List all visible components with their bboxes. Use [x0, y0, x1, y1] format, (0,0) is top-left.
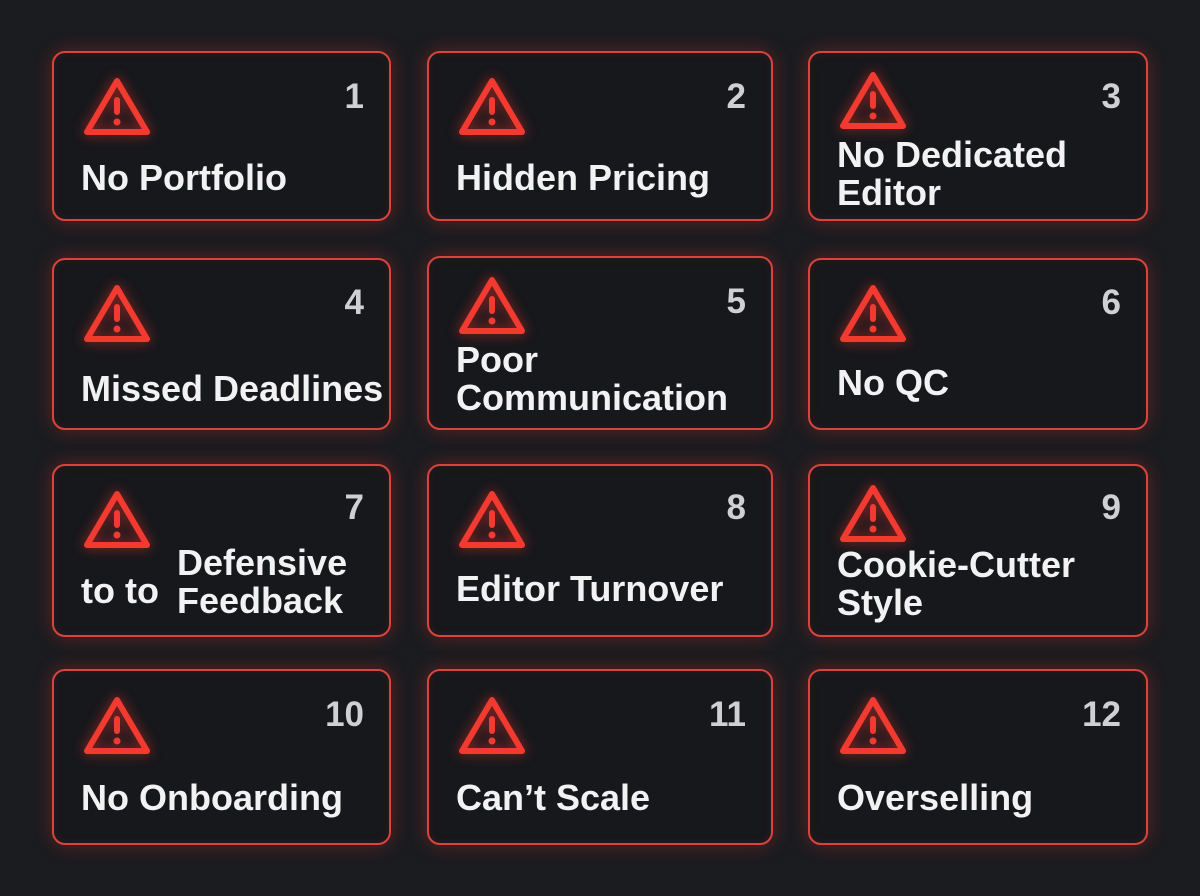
- title: No QC: [837, 362, 949, 403]
- card 6: [808, 258, 1148, 430]
- title: [837, 134, 1067, 213]
- icon: warning: [78, 485, 156, 557]
- number: 1: [345, 77, 364, 116]
- title: Poor: [456, 339, 538, 380]
- icon: warning: [834, 479, 912, 551]
- number: 4: [345, 283, 364, 322]
- number: 12: [1082, 695, 1121, 734]
- card 4: [52, 258, 391, 430]
- icon: warning: [452, 271, 532, 343]
- title: to to: [81, 570, 159, 611]
- number: 3: [1102, 77, 1121, 116]
- card 9: [808, 464, 1148, 637]
- title continued: Feedback: [177, 580, 343, 621]
- title: No Portfolio: [81, 157, 287, 198]
- number: 10: [325, 695, 364, 734]
- card 7: [52, 464, 391, 637]
- number: 7: [345, 488, 364, 527]
- card 1: [52, 51, 391, 221]
- number: 9: [1102, 488, 1121, 527]
- title continued: Defensive: [177, 542, 347, 583]
- icon: warning: [78, 691, 156, 763]
- card 10: [52, 669, 391, 845]
- title: Style: [837, 582, 923, 623]
- card 8: [427, 464, 773, 637]
- title: Editor: [837, 172, 941, 213]
- card 11: [427, 669, 773, 845]
- number: 6: [1102, 283, 1121, 322]
- title: Editor Turnover: [456, 568, 723, 609]
- title: Overselling: [837, 777, 1033, 818]
- title: [456, 339, 728, 418]
- number: 11: [709, 695, 746, 734]
- title: No Onboarding: [81, 777, 343, 818]
- card 3: [808, 51, 1148, 221]
- number: 5: [727, 282, 746, 321]
- title: [837, 544, 1075, 623]
- number: 2: [727, 77, 746, 116]
- title: Can’t Scale: [456, 777, 650, 818]
- icon: warning: [834, 66, 912, 138]
- title: Missed Deadlines: [81, 368, 383, 409]
- title continued: [177, 542, 347, 621]
- title: No Dedicated: [837, 134, 1067, 175]
- icon: warning: [452, 691, 532, 763]
- icon: warning: [78, 279, 156, 351]
- icon: warning: [834, 691, 912, 763]
- icon: warning: [452, 485, 532, 557]
- card 2: [427, 51, 773, 221]
- title: Hidden Pricing: [456, 157, 710, 198]
- title: Cookie-Cutter: [837, 544, 1075, 585]
- icon: warning: [78, 72, 156, 144]
- title: Communication: [456, 377, 728, 418]
- card 12: [808, 669, 1148, 845]
- icon: warning: [452, 72, 532, 144]
- card 5: [427, 256, 773, 430]
- icon: warning: [834, 279, 912, 351]
- number: 8: [727, 488, 746, 527]
